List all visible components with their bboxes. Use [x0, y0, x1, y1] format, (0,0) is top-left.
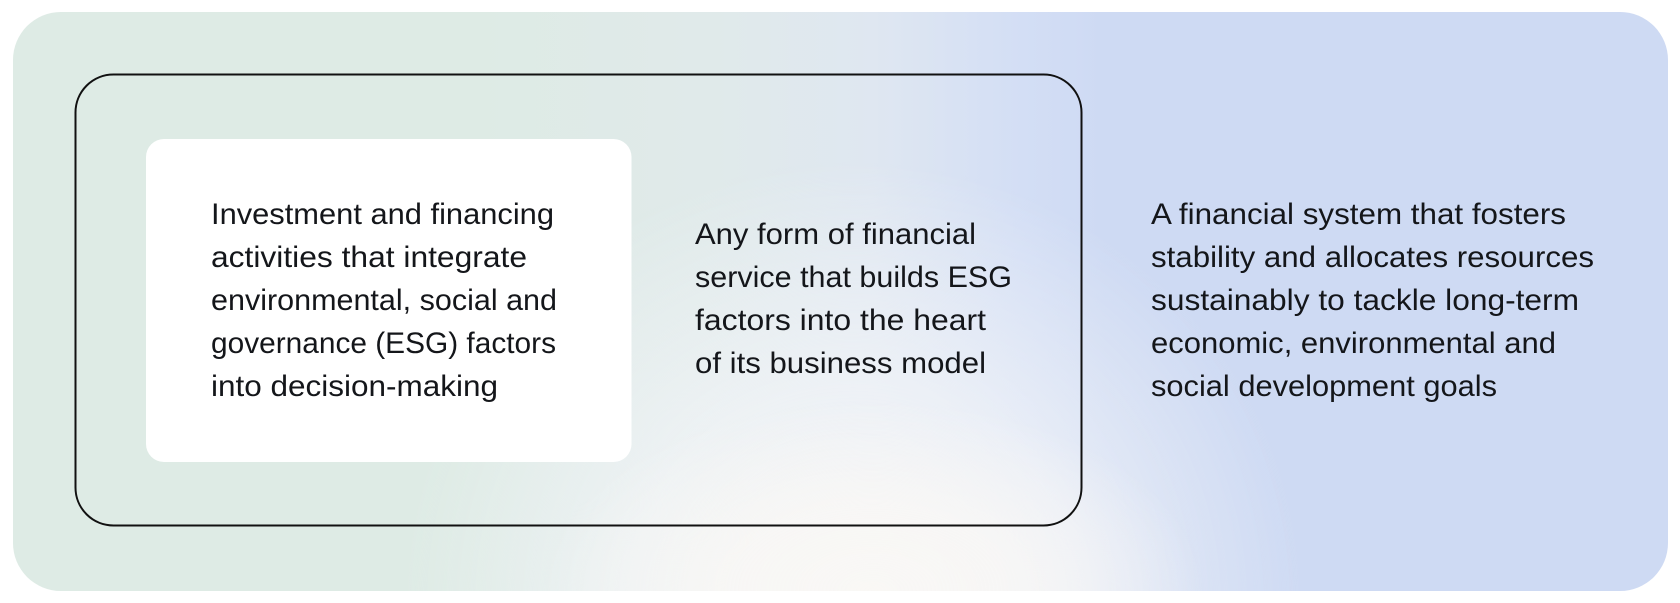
text block: outer definition: economic, environmental and [1151, 327, 1556, 360]
text block: outer definition: social development goals [1151, 370, 1497, 403]
text block: innermost definition: Investment and financing [211, 198, 554, 231]
text block: middle definition: factors into the heart [695, 304, 986, 337]
text block: innermost definition: activities that integrate [211, 241, 527, 274]
text block: outer definition [1151, 198, 1594, 403]
panel: white innermost card [146, 139, 632, 462]
text block: outer definition: stability and allocates resources [1151, 241, 1594, 274]
text block: innermost definition: governance (ESG) factors [211, 327, 556, 360]
text block: middle definition: Any form of financial [695, 218, 976, 251]
text block: innermost definition: into decision-making [211, 370, 498, 403]
text block: middle definition [695, 218, 1012, 380]
text block: middle definition: of its business model [695, 347, 986, 380]
text block: outer definition: A financial system that fosters [1151, 198, 1566, 231]
text block: innermost definition [211, 198, 557, 403]
text block: middle definition: service that builds ESG [695, 261, 1012, 294]
panel: inner outlined box [76, 74, 1082, 526]
text block: innermost definition: environmental, social and [211, 284, 557, 317]
text block: outer definition: sustainably to tackle long-term [1151, 284, 1579, 317]
